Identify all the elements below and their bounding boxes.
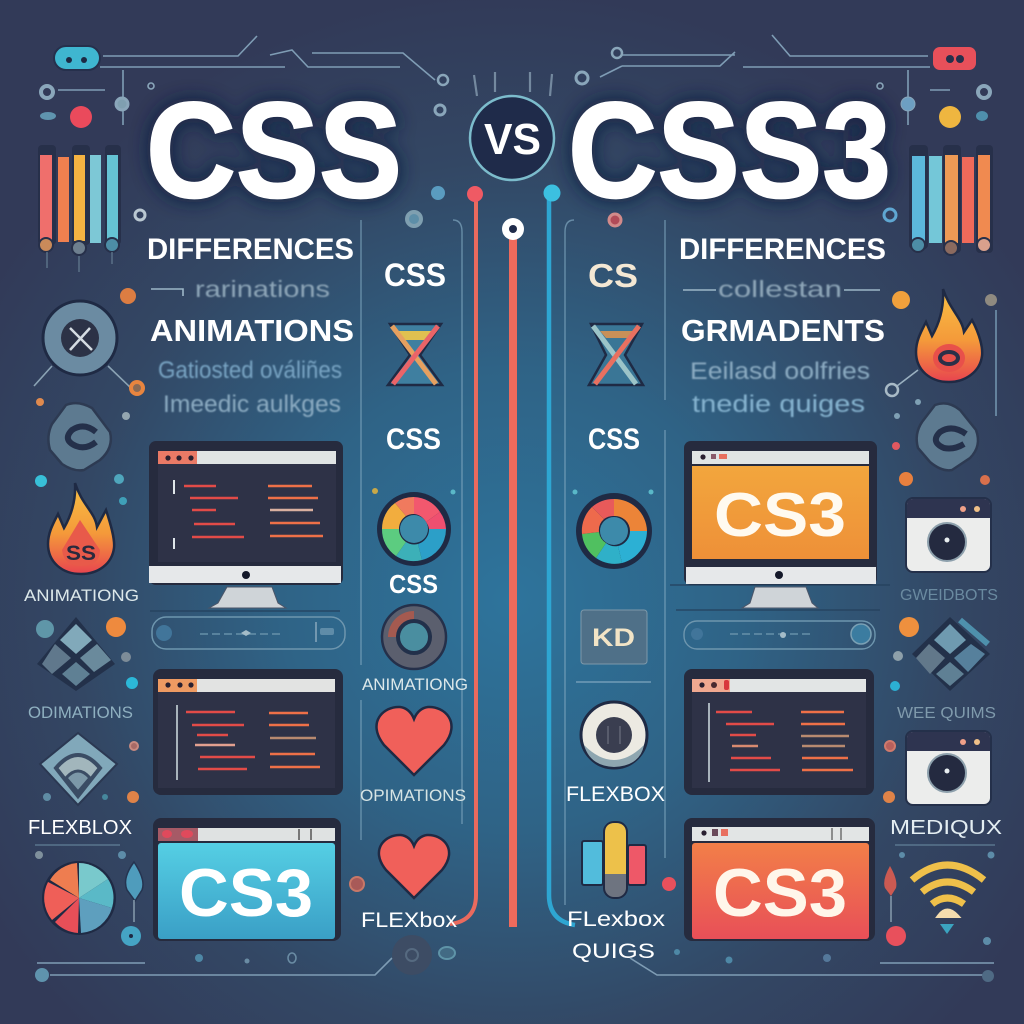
subtext line two: Imeedic aulkges — [163, 391, 341, 418]
title: CSS3: CSS3 — [568, 74, 891, 226]
divider: red line — [450, 186, 483, 924]
icon: KD box — [581, 610, 647, 664]
screen — [158, 692, 335, 788]
panel rules — [361, 220, 665, 905]
label: quis: QUIGS — [572, 940, 655, 963]
right top circuit decoration — [576, 35, 990, 128]
left icon: rounded C badge — [48, 403, 111, 470]
power button — [775, 571, 783, 579]
orange screen — [692, 466, 869, 559]
subtext line one: Gatiosted ováliñes — [158, 357, 342, 384]
red screen — [692, 843, 869, 939]
browser bar — [692, 679, 866, 692]
browser bar — [158, 828, 335, 841]
stand shadow — [670, 585, 890, 610]
window frame — [153, 669, 343, 795]
icon: eye disc — [576, 682, 651, 768]
left icon: flame with label: SS — [66, 542, 96, 565]
icon: heart — [376, 707, 452, 775]
right icon: camera lower — [883, 731, 991, 805]
right icon: flame — [886, 289, 997, 450]
screen — [692, 692, 866, 788]
subtext line one: Eeilasd oolfries — [690, 358, 870, 385]
chart: left colour bars — [38, 145, 121, 272]
chin — [686, 567, 876, 584]
icon: connector rings — [576, 48, 990, 111]
label: CS: CS — [588, 257, 638, 294]
left icon: wifi diamond — [40, 733, 139, 805]
right icon: camera top — [899, 472, 991, 572]
code lines — [709, 703, 853, 782]
browser bar — [158, 451, 336, 464]
window frame — [684, 669, 874, 795]
label: animationg: ANIMATIONG — [24, 586, 139, 605]
title: CSS3: CSS3 — [568, 74, 891, 226]
label: flexbox: FLEXBOX — [566, 783, 665, 806]
subtext: animations: rarinations — [195, 276, 330, 302]
stand shadow — [150, 610, 340, 612]
screen text: CS3 — [713, 855, 847, 931]
left centre column — [350, 257, 468, 932]
monitor body — [149, 441, 343, 585]
icon: heart — [379, 835, 449, 898]
right text block: differences and gradients — [679, 233, 886, 418]
icon: hourglass — [388, 324, 442, 385]
divider: centre line — [502, 218, 524, 927]
right CS3 window — [684, 818, 875, 941]
left text block: differences and animations — [147, 233, 354, 418]
power button — [242, 571, 250, 579]
stand — [742, 587, 818, 608]
icon: red dot — [70, 106, 92, 128]
label: CSS: CSS — [384, 257, 446, 293]
window frame — [684, 818, 875, 941]
icon: small red dot — [350, 877, 364, 891]
icon: blue pill — [54, 46, 100, 70]
subtext: collestan: collestan — [718, 276, 842, 302]
icon: small red dot — [662, 877, 676, 891]
right centre column — [566, 257, 676, 963]
chart: right colour bars — [909, 145, 993, 255]
left icon: diamond tiles — [36, 617, 138, 691]
right search bar — [684, 621, 875, 649]
browser bar — [692, 451, 869, 464]
title: CSS: CSS — [146, 74, 402, 226]
right footer circuit — [630, 949, 994, 982]
label: opimations: OPIMATIONS — [360, 786, 466, 805]
monitor body — [684, 441, 877, 585]
divider: blue line — [544, 184, 575, 925]
centre tick marks — [474, 72, 552, 96]
icon: KD box: KD — [592, 624, 635, 652]
icon: small teal oval — [976, 111, 988, 121]
right icon: rounded C badge — [917, 403, 978, 470]
left search bar — [152, 617, 345, 649]
title: CSS: CSS — [146, 74, 402, 226]
left footer circuit — [35, 935, 455, 982]
left icon: gear disc — [34, 288, 143, 420]
icon: donut chart — [572, 490, 654, 569]
heading: differences: DIFFERENCES — [679, 233, 886, 266]
label: animationg: ANIMATIONG — [362, 675, 468, 694]
code lines — [177, 705, 320, 780]
icon: connector rings — [41, 75, 448, 115]
icon: hourglass — [589, 324, 643, 385]
left monitor with code — [149, 441, 343, 611]
code lines — [174, 480, 323, 549]
heading: differences: DIFFERENCES — [147, 233, 354, 266]
screen — [158, 464, 336, 562]
badge: VS: VS — [484, 115, 541, 164]
label: flexblox: FLEXBLOX — [28, 817, 132, 839]
icon: small oval — [40, 112, 56, 120]
browser bar — [158, 679, 335, 692]
label: flexblox: FLEXbox — [361, 909, 458, 932]
label: mediqux: MEDIQUX — [890, 817, 1002, 839]
label: flexbox: FLexbox — [567, 908, 666, 931]
screen text: CS3 — [714, 481, 846, 550]
icon: flex bars — [582, 822, 646, 898]
label: CSS: CSS — [389, 569, 438, 599]
blue screen — [158, 843, 335, 939]
label: CSS: CSS — [588, 423, 640, 456]
heading: animations: ANIMATIONS — [150, 313, 354, 348]
subtext line two: tnedie quiges — [692, 391, 865, 418]
right monitor with CS3 — [670, 441, 890, 610]
heading: gradients: GRMADENTS — [681, 313, 885, 348]
chin — [149, 566, 341, 583]
dots near the centre panels — [135, 186, 896, 226]
badge: VS — [470, 96, 554, 180]
right icon: wifi — [895, 845, 995, 945]
icon: donut chart — [372, 488, 456, 566]
right code window — [684, 669, 874, 795]
window frame — [153, 818, 341, 941]
right icon: arrow pin — [884, 866, 906, 946]
browser bar — [692, 827, 869, 841]
label: CSS: CSS — [386, 423, 441, 456]
left icon: flame with label — [35, 474, 127, 574]
subtext: animations — [151, 276, 330, 302]
left CS3 window — [153, 818, 341, 941]
icon: red pill — [933, 47, 976, 70]
stand — [209, 587, 286, 608]
left code window — [153, 669, 343, 795]
faint label: middle right: WEE QUIMS — [897, 705, 996, 722]
right icon: diamond tiles — [890, 617, 990, 691]
faint label: top right: GWEIDBOTS — [900, 587, 998, 604]
label: odimations: ODIMATIONS — [28, 703, 133, 722]
screen text: CS3 — [179, 855, 313, 931]
left top circuit decoration — [40, 36, 448, 128]
left icon: pie chart — [35, 845, 126, 935]
icon: yellow dot — [939, 106, 961, 128]
left icon: leaf pin — [121, 862, 143, 946]
icon: ring — [382, 605, 446, 669]
